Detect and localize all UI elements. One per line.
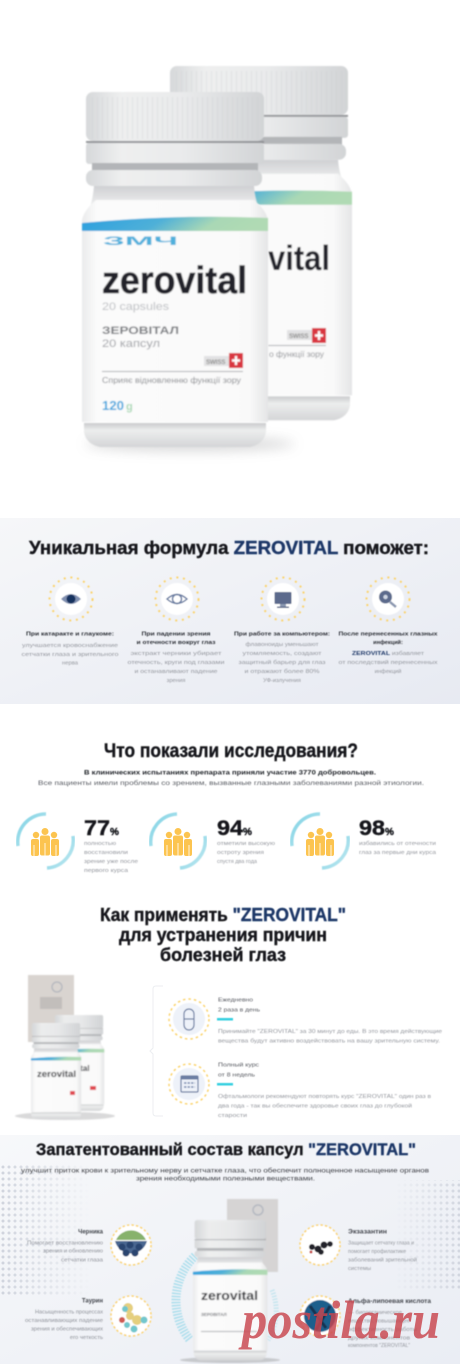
text: alpha lipoic acid: других компонентов	[348, 1336, 410, 1342]
watermark: postila.ru	[238, 1290, 440, 1350]
benefit: computer work: и отражают более 80%	[244, 669, 320, 675]
ingredient: alpha lipoic acid	[300, 1296, 432, 1349]
stat: 94%	[151, 814, 276, 868]
ingredient: taurine	[25, 1296, 151, 1341]
front bottle: g	[126, 401, 133, 413]
stat: 94%: остроту зрения	[217, 850, 264, 856]
icon: monitor	[262, 578, 304, 620]
intro text: В клинических испытаниях препарата приняли участие 3770 добровольцев.	[84, 768, 376, 776]
text: taurine: останавливающих падение	[25, 1318, 103, 1324]
stat: 98%: %	[385, 827, 394, 838]
back bottle: о функції зору	[269, 350, 324, 359]
step: daily: Ежедневно	[218, 998, 253, 1004]
text: taurine: его четкость	[70, 1335, 103, 1341]
text: zeaxanthin: системы	[348, 1266, 371, 1272]
benefit: computer work: утомляемость, создают	[242, 651, 322, 657]
stat: 98%: 98	[359, 817, 385, 840]
benefit: vision loss: и останавливают падение	[134, 669, 218, 675]
text: blueberry: сетчатки глаза	[61, 1258, 104, 1264]
heading: болезней глаз	[160, 945, 286, 965]
icon: magnifier	[366, 578, 410, 620]
step: full course	[169, 1062, 431, 1119]
bracket	[150, 986, 163, 1116]
text: zeaxanthin: Экзазантин	[348, 1230, 387, 1236]
ingredient: blueberry	[27, 1225, 151, 1265]
stat: 94%: %	[243, 827, 252, 838]
product: certificate and bottle: ЗЕРОВІТАЛ	[201, 1312, 227, 1317]
intro text: зрения необходимыми полезными веществами.	[136, 1174, 315, 1182]
text: taurine: зрения и обеспечивающих	[31, 1326, 103, 1332]
certificate and small bottles: ital	[78, 1064, 90, 1073]
benefit: vision loss	[128, 632, 224, 684]
front bottle: ЗЕРОВІТАЛ	[102, 325, 179, 337]
stat: 77%: полностью	[84, 841, 117, 847]
benefit: computer work: флавоноиды уменьшают	[246, 642, 319, 648]
text: zeaxanthin	[348, 1230, 417, 1272]
front bottle: 120	[102, 398, 124, 413]
halftone pattern	[0, 1165, 460, 1295]
benefit: vision loss: и отечности вокруг глаз	[136, 640, 216, 646]
step: daily: Принимайте "ZEROVITAL" за 30 минут до еды. В это время действующие	[218, 1028, 442, 1035]
benefit: cataract	[22, 632, 118, 666]
heading: Уникальная формула ZEROVITAL поможет:	[29, 538, 429, 558]
step: full course: от 8 недель	[218, 1072, 255, 1078]
text: alpha lipoic acid: компонентов "ZEROVITAL"	[348, 1343, 410, 1349]
benefit: infections	[338, 632, 439, 675]
text: taurine: Насыщенность процессах	[35, 1310, 103, 1316]
stat: 94%: спустя два года	[217, 859, 258, 865]
benefit: infections: ZEROVITAL избавляет	[352, 651, 424, 657]
step: daily: вещества будут активно воздействовать на вашу зрительную систему.	[218, 1038, 440, 1044]
hex arc decoration	[176, 1256, 276, 1340]
panel: research results	[18, 741, 437, 874]
heading: Запатентованный состав капсул "ZEROVITAL"	[36, 1140, 416, 1159]
stat: 77%	[18, 814, 138, 874]
stat: 94%: 94	[217, 817, 243, 840]
certificate and small bottles: zerovital	[37, 1069, 76, 1079]
text: taurine: Таурин	[82, 1298, 103, 1304]
step: full course: два года - так вы обеспечите здоровье своих глаз до глубокой	[218, 1102, 412, 1110]
text: blueberry: Помогает восстановлению	[27, 1240, 104, 1246]
stat: 98%: избавились от отечности	[359, 841, 436, 847]
benefit: infections: инфекций:	[373, 639, 403, 646]
front bottle	[82, 92, 268, 447]
step: full course: старости	[218, 1113, 247, 1119]
benefit: vision loss: При падении зрения	[142, 632, 210, 638]
text: alpha lipoic acid: вещество, повышающее	[348, 1318, 410, 1324]
benefit: infections: После перенесенных глазных	[338, 632, 439, 638]
text: zeaxanthin: Защищает сетчатку глаза и	[348, 1240, 414, 1246]
step: daily: 2 раза в день	[218, 1008, 260, 1014]
step: full course: Полный курс	[218, 1062, 259, 1068]
back bottle: SWISS	[289, 334, 308, 340]
heading: Как применять "ZEROVITAL"	[100, 905, 346, 925]
benefit text	[22, 630, 439, 684]
benefit: computer work	[234, 630, 330, 684]
stat: 77%: зрение уже после	[84, 859, 138, 865]
benefit: cataract: улучшается кровоснабжение	[22, 643, 118, 649]
back bottle: vital	[268, 239, 330, 278]
text: taurine	[25, 1298, 103, 1341]
benefit: computer work: защитный барьер для глаз	[238, 659, 326, 666]
benefit: vision loss: отечность, круги под глазами	[128, 660, 224, 666]
front bottle: 20 капсул	[102, 338, 160, 350]
intro text	[21, 1166, 430, 1182]
front bottle: Сприяє відновленню функції зору	[102, 376, 241, 385]
benefit: computer work: При работе за компьютером:	[234, 630, 330, 638]
icon: molecule	[111, 1296, 151, 1336]
text: alpha lipoic acid	[348, 1298, 432, 1349]
benefit: vision loss: зрения	[167, 678, 185, 684]
stat: 98%	[292, 814, 437, 868]
ingredient: zeaxanthin	[300, 1225, 417, 1272]
heading	[100, 905, 346, 965]
certificate and small bottles	[15, 975, 115, 1120]
product hero: two zerovital bottles	[82, 66, 352, 451]
heading: для устранения причин	[119, 925, 327, 945]
product: certificate and bottle	[180, 1199, 280, 1363]
benefit: computer work: УФ-излучения	[263, 678, 301, 684]
intro text: Все пациенты имели проблемы со зрением, вызванные глазными заболеваниями разной этиологии.	[38, 779, 424, 787]
benefit: infections: инфекций	[375, 668, 401, 675]
text: alpha lipoic acid: Альфа-липоевая кислота	[348, 1298, 432, 1305]
intro text	[38, 768, 424, 787]
icon: eye	[50, 578, 92, 620]
front bottle: SWISS	[206, 360, 225, 366]
icon: capsule	[169, 999, 209, 1039]
text: zeaxanthin: заболеваний зрительной	[348, 1256, 417, 1264]
text: zeaxanthin: помогает профилактике	[348, 1249, 406, 1255]
step: daily	[169, 998, 442, 1044]
panel: how to use	[15, 905, 442, 1120]
icon: dark berries	[300, 1225, 340, 1265]
product: certificate and bottle: zerovital	[201, 1288, 258, 1303]
stat: 77%: восстановили	[84, 850, 128, 856]
benefit: infections: от последствий перенесенных	[338, 659, 438, 666]
bottle shadow	[85, 437, 295, 451]
stat: 94%: отметили высокую	[217, 841, 276, 847]
stat: 98%: глаз за первые дни курса	[359, 850, 437, 856]
icon: blueberries	[111, 1225, 151, 1265]
benefit: vision loss: экстракт черники убирает	[130, 651, 222, 657]
icon: blue tissue	[300, 1296, 340, 1336]
swiss badge	[204, 356, 229, 366]
text: blueberry	[27, 1230, 104, 1264]
text: blueberry: Черника	[78, 1230, 104, 1236]
stat: 77%: %	[110, 827, 119, 838]
panel: patented composition	[0, 1135, 460, 1364]
stat: 77%: первого курса	[84, 868, 129, 874]
heading: Что показали исследования?	[104, 741, 358, 762]
panel: formula benefits	[0, 518, 460, 704]
intro text: улучшит приток крови к зрительному нерву и сетчатке глаза, что обеспечит полноценное насыщение органов	[21, 1166, 430, 1174]
product name: zerovital	[102, 260, 247, 302]
icon: eye outline	[156, 578, 198, 620]
step: full course: Офтальмологи рекомендуют повторять курс "ZEROVITAL" один раз в	[218, 1094, 431, 1100]
icon: calendar	[169, 1064, 209, 1104]
text: alpha lipoic acid: эффективность работы	[348, 1327, 417, 1333]
front bottle: 20 capsules	[102, 301, 170, 313]
text: blueberry: зрения и обновлению	[43, 1248, 104, 1254]
benefit: cataract: нерва	[62, 660, 79, 666]
benefit: cataract: сетчатки глаза и зрительного	[22, 652, 118, 658]
brand logo: ЗМЧ	[103, 234, 178, 248]
back bottle	[166, 66, 352, 420]
benefit: cataract: При катаракте и глаукоме:	[26, 632, 114, 638]
stat: 77%: 77	[84, 817, 110, 840]
text: alpha lipoic acid: — биоорганическое	[348, 1310, 402, 1316]
